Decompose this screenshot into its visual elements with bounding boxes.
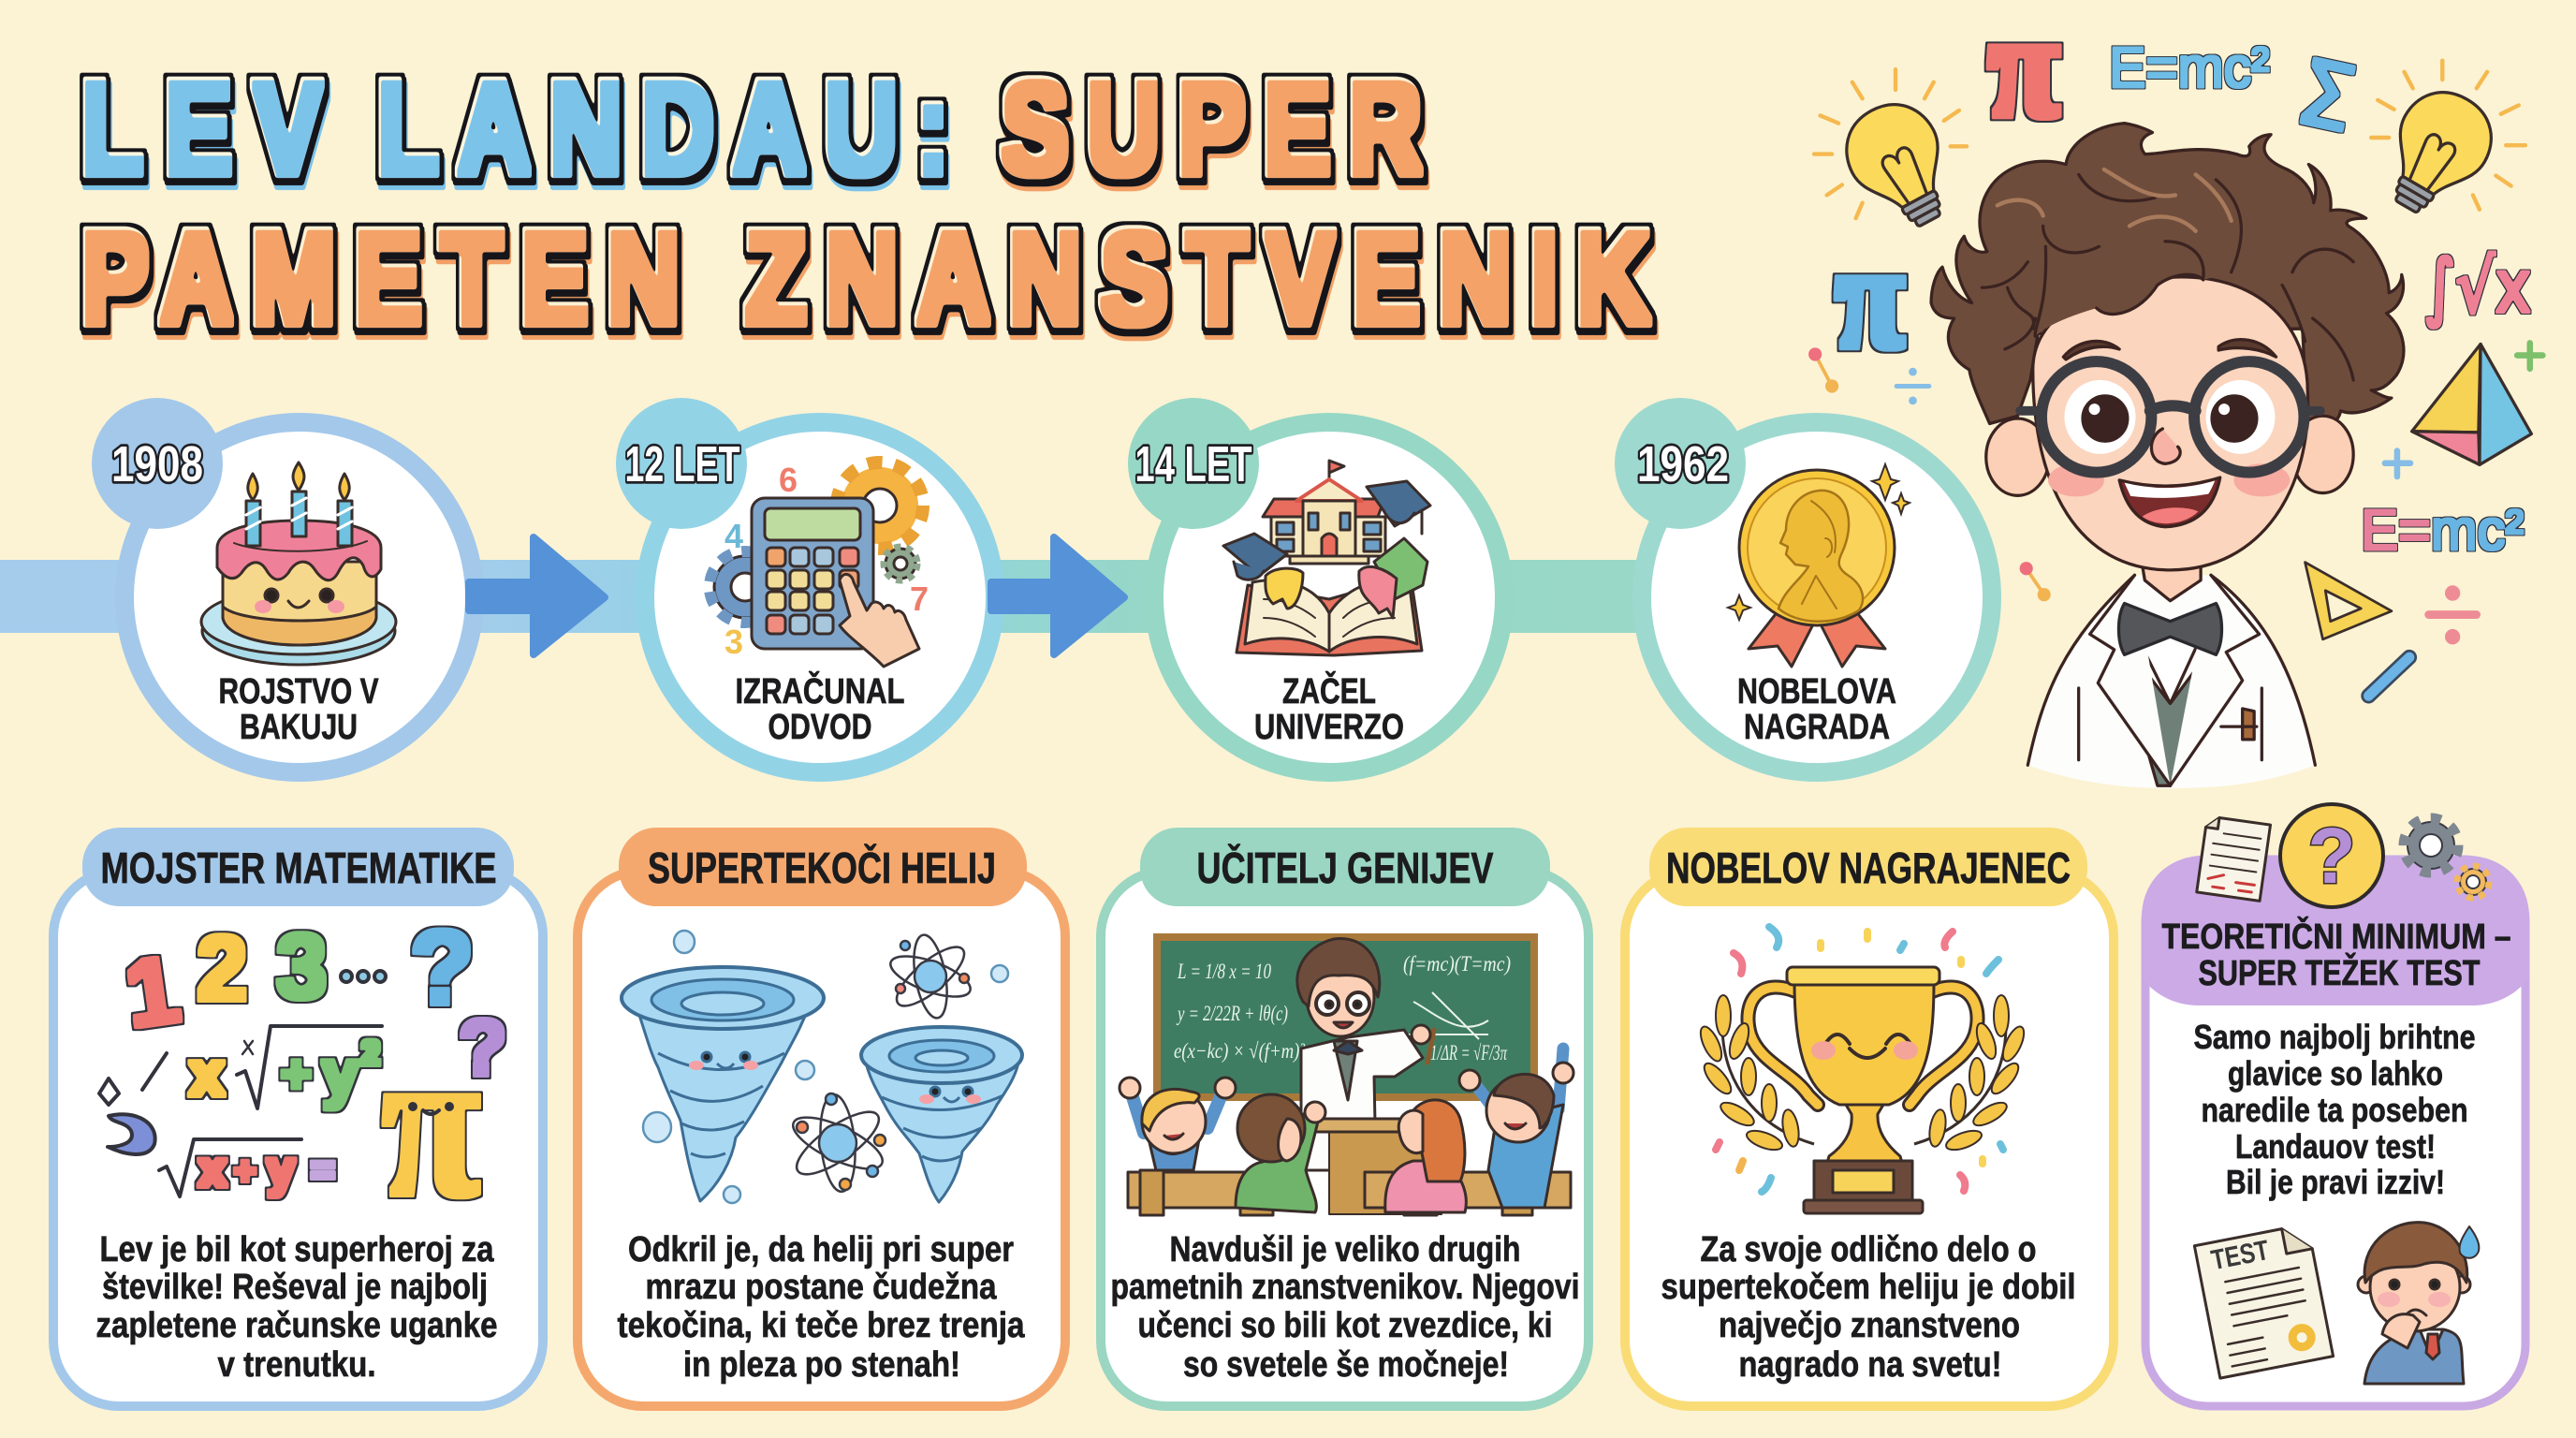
illustration: chalkboard: y = 2/22R + lθ(c) (1177, 1002, 1288, 1025)
label: Izračunal odvod: IZRAČUNAL (736, 669, 904, 712)
label: Rojstvo v Bakuju (219, 672, 379, 747)
timeline node: 1962 Nobel prize (1615, 398, 1992, 772)
arrow: calculation to university (991, 537, 1124, 654)
symbols: formulas and sigma (2109, 36, 2531, 562)
body text (95, 1230, 498, 1385)
illustration: top atom (886, 932, 975, 1020)
heading pill (1649, 828, 2087, 906)
age badge 14 let (1128, 398, 1259, 529)
panel: Nobelov nagrajenec (1625, 828, 2114, 1406)
label: Nobelova nagrada: NAGRADA (1744, 708, 1890, 747)
icon: birthday cake (201, 462, 396, 665)
body text: in pleza po stenah! (683, 1345, 960, 1385)
illustration: colourful numbers and formulas: + (234, 1151, 256, 1192)
body text: tekočina, ki teče brez trenja (618, 1306, 1025, 1345)
body text: Bil je pravi izziv! (2226, 1163, 2445, 1201)
label: Začel univerzo: ZAČEL (1282, 669, 1376, 712)
eyes (2064, 380, 2136, 454)
illustration: teacher (1297, 938, 1434, 1170)
icon: left light bulb (1814, 69, 1970, 242)
arrow: birth to calculation (469, 537, 605, 654)
body text: nagrado na svetu! (1739, 1345, 2001, 1385)
body text (618, 1230, 1025, 1385)
timeline node: 12 let calculus (616, 398, 995, 772)
timeline bar (0, 560, 1685, 633)
body text (1661, 1230, 2076, 1385)
heading pill (82, 828, 514, 906)
symbols: formulas and sigma: Σ (2288, 38, 2364, 154)
icon: calculator with gears (710, 462, 923, 667)
illustration: desks and podium (1128, 1119, 1571, 1215)
heading pill: UČITELJ GENIJEV (1196, 844, 1494, 892)
illustration: large tornado (622, 967, 824, 1201)
heading pill: MOJSTER MATEMATIKE (101, 844, 496, 892)
body text (1110, 1230, 1580, 1385)
label: Rojstvo v Bakuju: ROJSTVO V (219, 672, 379, 712)
title: PAMETEN ZNANSTVENIK (80, 203, 1649, 350)
heading text (2162, 915, 2510, 993)
heading pill: SUPERTEKOČI HELIJ (648, 844, 996, 892)
label: Začel univerzo: UNIVERZO (1254, 708, 1404, 747)
illustration: colourful numbers and formulas: 1 (119, 936, 185, 1048)
illustration: colourful numbers and formulas: ? (459, 1004, 506, 1092)
title (80, 53, 1649, 350)
illustration: colourful numbers and formulas (119, 909, 506, 1241)
body text: Za svoje odlično delo o (1700, 1230, 2037, 1269)
icon: ruler triangle (2305, 563, 2392, 639)
label: Nobelova nagrada (1737, 672, 1896, 747)
heading text: SUPER TEŽEK TEST (2198, 952, 2481, 993)
body text: mrazu postane čudežna (646, 1268, 997, 1307)
front hair (2035, 169, 2318, 342)
body text: Lev je bil kot superheroj za (99, 1230, 494, 1269)
body text: učenci so bili kot zvezdice, ki (1138, 1306, 1552, 1345)
illustration: chalkboard (1157, 937, 1534, 1097)
illustration: chalkboard: e(x−kc) × √(f+m)² (1174, 1039, 1306, 1063)
illustration: bottom atom (786, 1093, 889, 1193)
icon: gold medal (1739, 470, 1895, 667)
body text: zapletene računske uganke (95, 1306, 498, 1345)
year badge 1962: 1962 (1637, 436, 1729, 492)
illustration: laurel branches (1696, 995, 2028, 1153)
floating digits: 6 (779, 461, 798, 499)
body text: Landauov test! (2235, 1127, 2436, 1166)
body text: naredile ta poseben (2202, 1091, 2467, 1129)
year badge 1908: 1908 (111, 436, 203, 492)
illustration: colourful numbers and formulas: x (189, 1038, 225, 1109)
illustration: colourful numbers and formulas: π (382, 1003, 480, 1241)
illustration: colourful numbers and formulas: y (322, 1036, 359, 1109)
glasses (2020, 361, 2320, 473)
title: LEV (80, 53, 321, 200)
panel: Mojster matematike (53, 828, 543, 1406)
title: SUPER (1001, 53, 1422, 200)
floating digits (724, 461, 929, 661)
illustration: colourful numbers and formulas: 3 (276, 915, 328, 1018)
heading pill (619, 828, 1027, 906)
bow tie (2118, 603, 2222, 654)
icon: gears (2404, 818, 2489, 898)
icon: test paper: TEST (2209, 1235, 2272, 1276)
icon: test paper (2194, 1224, 2334, 1378)
ears (1986, 418, 2049, 495)
icon: university, book and caps (1223, 461, 1430, 655)
icon: question mark medallion: ? (2307, 812, 2356, 900)
panel: Supertekoči helij (578, 828, 1065, 1406)
body text (2194, 1018, 2475, 1201)
icon: question mark medallion (2280, 804, 2383, 907)
icon: plus and divide signs (1896, 343, 2542, 644)
label: Rojstvo v Bakuju: BAKUJU (240, 708, 358, 747)
nose (2151, 429, 2180, 463)
label: Izračunal odvod (736, 669, 904, 747)
dots and root signs (99, 971, 452, 1196)
body text: v trenutku. (217, 1345, 376, 1385)
panel: Učitelj genijev (1101, 828, 1588, 1406)
heading pill: NOBELOV NAGRAJENEC (1666, 844, 2071, 892)
illustration: colourful numbers and formulas: 2 (361, 1034, 380, 1072)
timeline node: 14 let university (1128, 398, 1504, 772)
eyebrows (2063, 341, 2119, 360)
illustration: colourful numbers and formulas: + (281, 1044, 312, 1103)
symbols: formulas and sigma: E=mc² (2109, 36, 2269, 99)
body text: pametnih znanstvenikov. Njegovi (1110, 1268, 1580, 1307)
icon: right light bulb (2366, 61, 2525, 229)
face (2033, 277, 2308, 570)
purple header (2142, 856, 2529, 1005)
illustration: colourful numbers and formulas: 2 (197, 917, 248, 1020)
age badge 12 let: 12 LET (625, 436, 740, 492)
floating digits: 3 (724, 623, 743, 661)
illustration: small tornado (861, 1027, 1022, 1202)
head (1931, 124, 2404, 570)
symbols: formulas and sigma: ∫√x (2423, 243, 2531, 330)
illustration: colourful numbers and formulas: x (198, 1141, 227, 1197)
icon: sparkles (1728, 464, 1910, 620)
icon: blue bar (2368, 657, 2409, 696)
label: Nobelova nagrada: NOBELOVA (1737, 672, 1896, 712)
icon: pyramid (2412, 344, 2531, 464)
symbols: pi signs (1836, 0, 2059, 379)
year badge 1908 (92, 398, 223, 529)
bubbles (643, 931, 1008, 1203)
back hair (1931, 124, 2404, 432)
icon: connector dots (1808, 347, 2051, 601)
body text: so svetele še močneje! (1183, 1345, 1509, 1385)
label: Začel univerzo (1254, 669, 1404, 747)
year badge 1962 (1615, 398, 1746, 529)
illustration: colourful numbers and formulas: y (267, 1141, 295, 1197)
heading text: TEORETIČNI MINIMUM – (2162, 915, 2510, 957)
illustration: confetti (1716, 927, 2003, 1192)
title: LANDAU: (376, 53, 949, 200)
illustration: colourful numbers and formulas: = (311, 1147, 335, 1193)
symbols: formulas and sigma: E=mc² (2361, 498, 2524, 562)
floating digits: 7 (910, 580, 929, 618)
body text: supertekočem heliju je dobil (1661, 1268, 2076, 1307)
mouth (2119, 477, 2220, 527)
timeline node: 1908 birth in Baku (92, 398, 475, 772)
heading pill (1140, 828, 1550, 906)
symbols: pi signs: π (1836, 215, 1904, 379)
label: Izračunal odvod: ODVOD (768, 708, 872, 747)
illustration: trophy (1748, 967, 1978, 1213)
illustration: cheering students (1120, 1049, 1573, 1212)
illustration: chalkboard: 1/ΔR = √F/3π (1430, 1041, 1508, 1064)
floating digits: 4 (724, 517, 743, 555)
icon: worried student (2358, 1223, 2479, 1384)
illustration: colourful numbers and formulas: ? (410, 909, 474, 1026)
body text: številke! Reševal je najbolj (102, 1268, 488, 1307)
illustration: chalkboard: (f=mc)(T=mc) (1403, 952, 1511, 976)
body text: glavice so lahko (2228, 1054, 2443, 1093)
illustration: chalkboard: L = 1/8 x = 10 (1177, 960, 1271, 983)
panel: Teoretični minimum (2142, 804, 2529, 1406)
icon: paper with notes (2197, 816, 2271, 901)
age badge 14 let: 14 LET (1134, 436, 1252, 492)
body text: Samo najbolj brihtne (2194, 1018, 2475, 1056)
age badge 12 let (616, 398, 747, 529)
scientist illustration with floating math (1808, 0, 2542, 788)
body text: Navdušil je veliko drugih (1170, 1230, 1520, 1269)
body text: Odkril je, da helij pri super (628, 1230, 1014, 1269)
coat (2027, 565, 2315, 788)
body text: največjo znanstveno (1719, 1306, 2020, 1345)
